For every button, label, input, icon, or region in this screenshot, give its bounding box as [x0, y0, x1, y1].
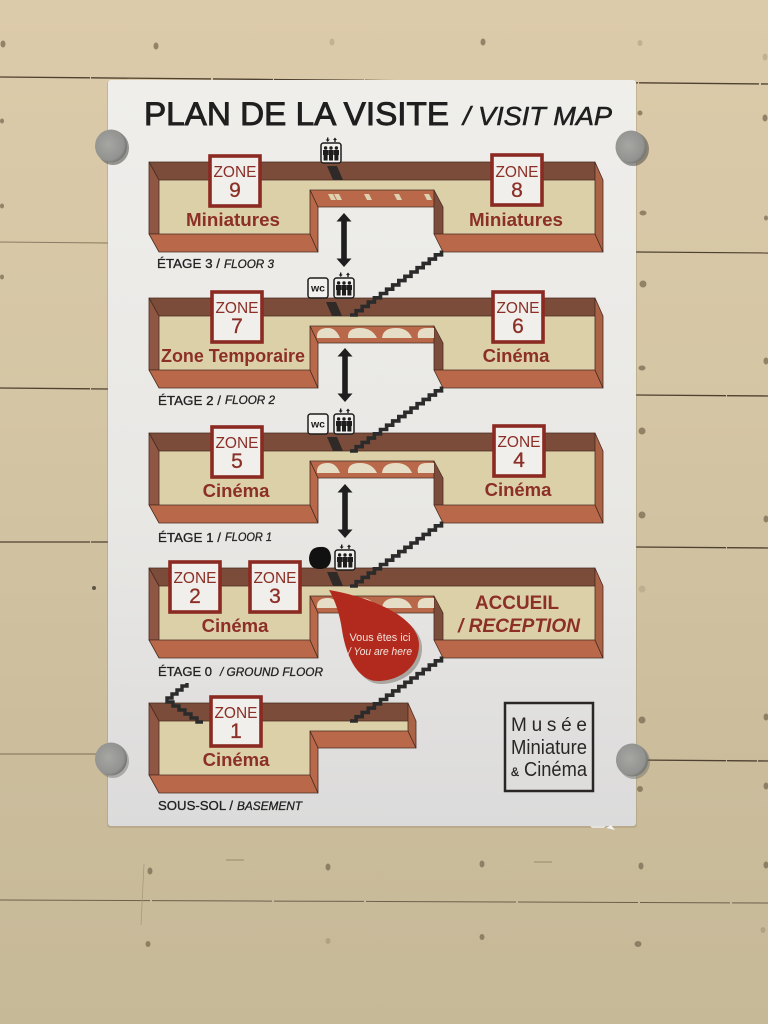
logo: Musée Miniature & Cinéma [505, 703, 593, 791]
zone 9: 9 [229, 179, 241, 202]
zone 6: ZONE [496, 300, 540, 317]
zone 7: ZONE [215, 300, 259, 317]
floor label 3 [157, 256, 274, 271]
floor label basement [158, 798, 304, 813]
zone 6: 6 [512, 315, 524, 338]
zone 2: 2 [189, 585, 201, 608]
label: Accueil / Reception [457, 593, 581, 637]
basement [149, 683, 416, 793]
floor label 0: ÉTAGE 0 [158, 664, 212, 679]
callout: you are here: Vous êtes ici [350, 632, 410, 644]
label: Cinéma right: Cinéma [485, 479, 552, 500]
zone 2: ZONE [173, 570, 217, 587]
zone 3: 3 [269, 585, 281, 608]
zone 5 [212, 427, 262, 477]
floor label 2 [158, 393, 275, 408]
label: Zone Temporaire: Zone Temporaire [161, 345, 305, 366]
icon: lift floor 2 [334, 272, 354, 298]
zone 4: ZONE [497, 434, 541, 451]
stairs: basement left [167, 683, 203, 722]
floor label 1: ÉTAGE 1 / [158, 530, 221, 545]
floor label basement: SOUS-SOL / [158, 798, 233, 813]
zone 8: ZONE [495, 164, 539, 181]
zone 1: ZONE [214, 705, 258, 722]
floor label 3: ÉTAGE 3 / [157, 256, 220, 271]
icon: covered wc sign [309, 547, 331, 569]
logo: Musée Miniature & Cinéma: Miniature [511, 736, 587, 759]
title [144, 96, 612, 132]
lift shaft floor 0 [327, 572, 343, 586]
lift shaft floor 2 [326, 302, 342, 316]
arrow: floor 1 to 0 [338, 484, 352, 538]
zone 4: 4 [513, 449, 525, 472]
floor 3 [149, 155, 603, 252]
logo: Musée Miniature & Cinéma: Cinéma [524, 758, 588, 781]
callout: you are here [329, 590, 422, 684]
label: Miniatures right: Miniatures [469, 209, 563, 230]
zone 8 [492, 155, 542, 205]
zone 2 [170, 562, 220, 612]
zone 8: 8 [511, 179, 523, 202]
panel: sign board [107, 80, 637, 830]
zone 5: ZONE [215, 435, 259, 452]
icon: wc floor 1 [308, 414, 328, 434]
label: Cinéma: Cinéma [203, 749, 270, 770]
zone 6 [493, 292, 543, 342]
stairs: floor 1 to 0 [350, 522, 442, 586]
zone 7: 7 [231, 315, 243, 338]
floor 0 [149, 562, 603, 658]
zone 4 [494, 426, 544, 476]
floor 1 [149, 426, 603, 523]
stairs: floor 0 to basement [350, 656, 442, 721]
stairs: floor 2 to 1 [350, 386, 442, 451]
bolt: top left [95, 130, 129, 165]
lift shaft floor 3 [327, 166, 343, 180]
icon: wc floor 2 [308, 278, 328, 298]
label: Cinéma left: Cinéma [203, 480, 270, 501]
zone 3: ZONE [253, 570, 297, 587]
zone 5: 5 [231, 450, 243, 473]
icon: lift floor 0 [335, 544, 355, 570]
floor label 1: FLOOR 1 [225, 530, 272, 544]
title: PLAN DE LA VISITE [144, 96, 449, 132]
label: Accueil / Reception: / RECEPTION [457, 616, 581, 637]
floor label 1 [158, 530, 272, 545]
logo: Musée Miniature & Cinéma: Musée [511, 715, 587, 736]
zone 3 [250, 562, 300, 612]
arrow: floor 3 to 2 [336, 213, 352, 267]
floor label 2: FLOOR 2 [225, 393, 275, 407]
floor label basement: BASEMENT [237, 799, 304, 813]
floor label 3: FLOOR 3 [224, 257, 274, 271]
bolt: bottom left [95, 742, 129, 778]
zone 1: 1 [230, 720, 242, 743]
label: Miniatures left: Miniatures [186, 209, 280, 230]
label: Accueil / Reception: ACCUEIL [475, 593, 559, 614]
zone 9 [210, 156, 260, 206]
logo: Musée Miniature & Cinéma: & [511, 765, 519, 779]
callout: you are here: / You are here [347, 646, 412, 658]
floor label 2: ÉTAGE 2 / [158, 393, 221, 408]
icon: lift floor 1 [334, 408, 354, 434]
zone 9: ZONE [213, 164, 257, 181]
zone 7 [212, 292, 262, 342]
title: / VISIT MAP [461, 103, 612, 131]
lift shaft floor 1 [327, 437, 343, 451]
arrow: floor 2 to 1 [338, 348, 352, 402]
windows floor 3 [328, 194, 432, 200]
floor label 0 [158, 664, 323, 679]
bolt: top right [616, 130, 649, 166]
bolt: bottom right [616, 744, 650, 779]
label: Cinéma right: Cinéma [483, 345, 550, 366]
stairs: floor 3 to 2 [350, 250, 442, 315]
icon: lift floor 3 [321, 138, 341, 163]
zone 1 [211, 697, 261, 746]
floor label 0: / GROUND FLOOR [219, 665, 323, 679]
floor 2 [149, 292, 603, 388]
label: Cinéma: Cinéma [202, 615, 269, 636]
